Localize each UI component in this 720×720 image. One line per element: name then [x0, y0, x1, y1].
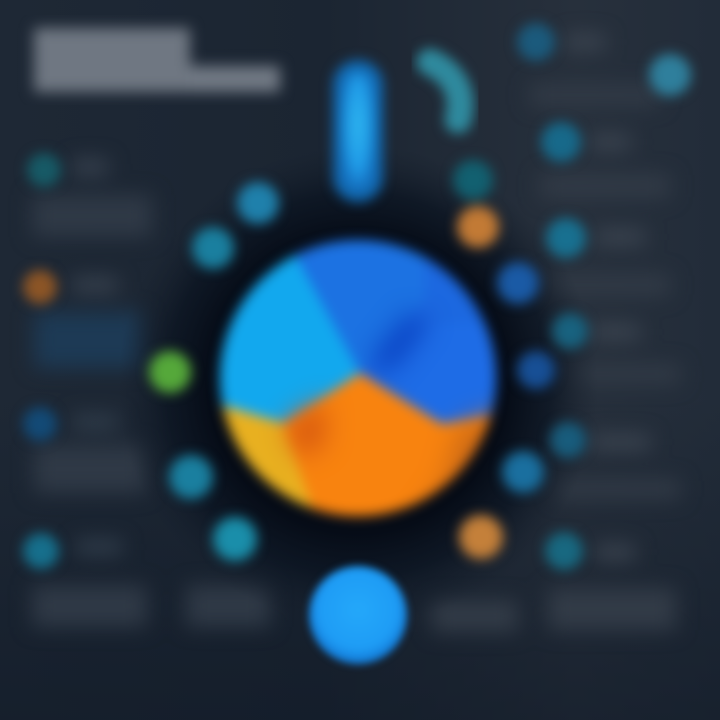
icon: ring dot: [192, 227, 234, 269]
slice: orange: [283, 373, 510, 530]
icon: cyan dot: [23, 533, 59, 569]
icon: dot: [546, 218, 586, 258]
slice: top blue: [311, 244, 420, 355]
icon: dot: [552, 313, 588, 349]
pie chart: [205, 225, 510, 530]
icon: ring dot: [497, 262, 539, 304]
icon: orange dot: [23, 270, 57, 304]
icon: ring dot: [237, 182, 279, 224]
panel: right column text: [432, 35, 680, 632]
slice: right blue: [385, 320, 510, 425]
slice: red-orange shade: [285, 400, 325, 458]
icon: dot: [517, 23, 555, 61]
pie shadow: [118, 145, 598, 625]
icon: dot: [541, 122, 581, 162]
icon: blue dot: [23, 407, 57, 441]
icon: top pill: [333, 60, 383, 202]
slice: dark seam: [368, 312, 430, 372]
icon: arc: [430, 62, 460, 120]
icon: ring dot: [213, 517, 257, 561]
icon: ring dot: [453, 160, 493, 200]
slice: base blue: [288, 246, 491, 428]
icon: green dot: [149, 351, 191, 393]
slice: yellow: [215, 398, 320, 515]
slice: light blue: [214, 251, 364, 428]
panel: left column text: [32, 160, 270, 627]
icon: ring dot: [517, 351, 555, 389]
icon: ring dot: [169, 455, 213, 499]
right column dots: [517, 23, 691, 570]
title block: [34, 28, 280, 92]
ring dots around the pie: [149, 160, 555, 561]
icon: ring dot: [502, 451, 544, 493]
icon: dot: [550, 422, 586, 458]
slice: dark orange rim: [428, 396, 497, 492]
icon: bottom circle: [309, 566, 407, 664]
icon: dot: [649, 54, 691, 96]
left column dots: [23, 153, 61, 569]
icon: teal dot: [27, 153, 61, 187]
icon: orange dot: [457, 206, 499, 248]
icon: dot: [545, 532, 583, 570]
icon: orange dot: [459, 515, 503, 559]
